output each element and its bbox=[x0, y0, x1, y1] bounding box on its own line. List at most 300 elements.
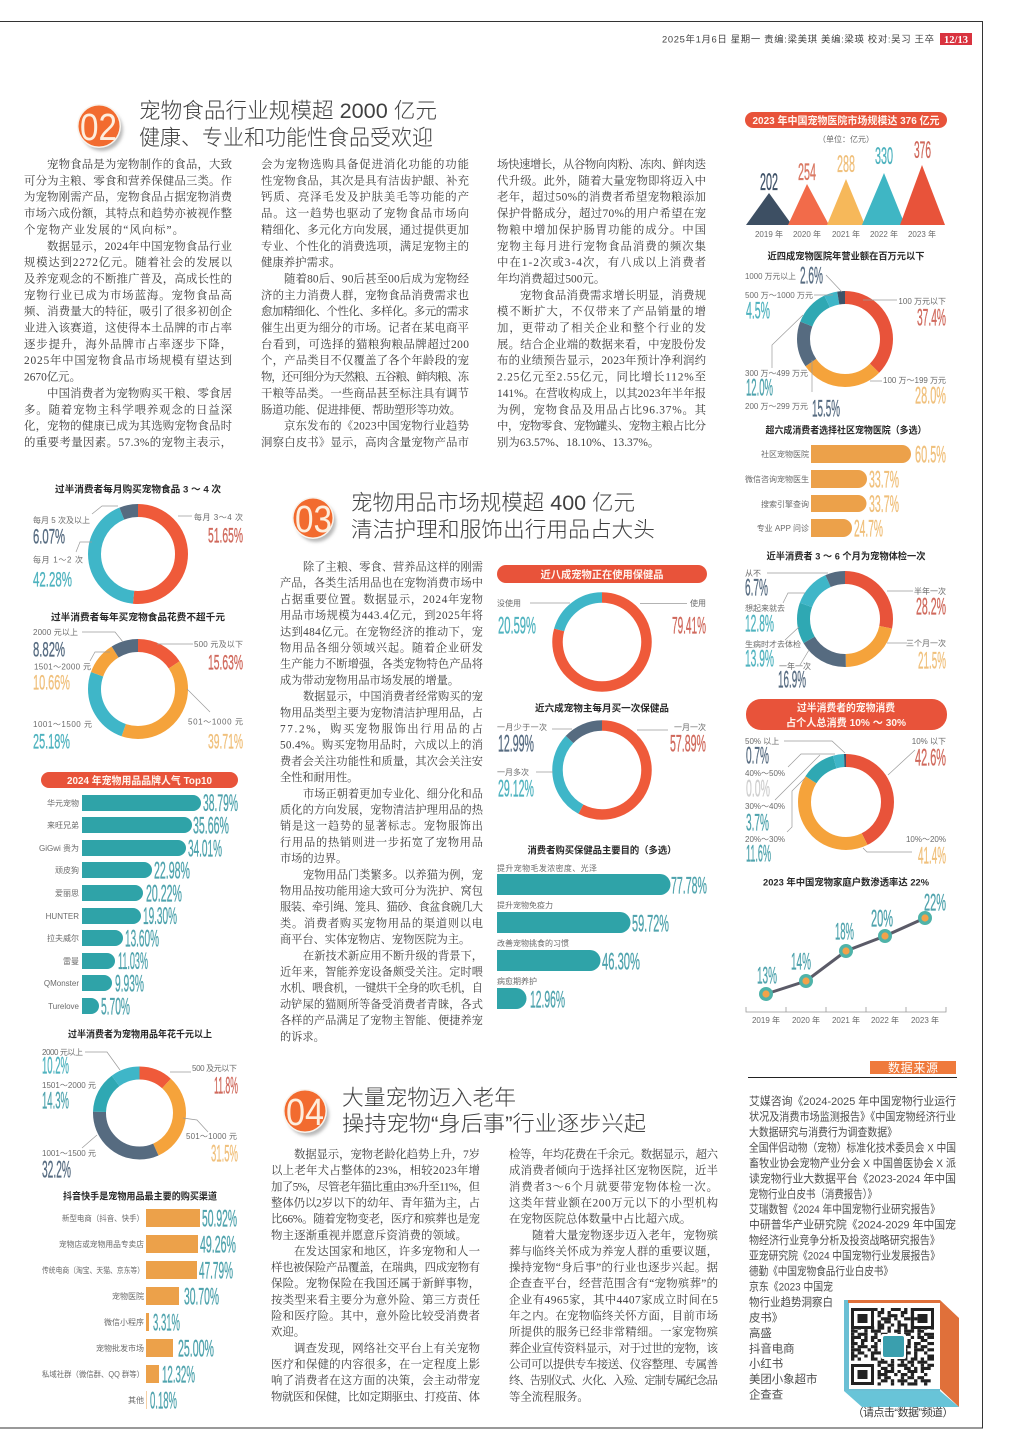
section 02 body column 2: 京东发布的《2023中国宠物行业趋势 bbox=[284, 419, 469, 433]
section 02 body column 1: 逐步提升，海外品牌市占率逐步下降， bbox=[24, 337, 232, 351]
section 02 body column 3: 2.25亿元至2.55亿元，同比增长112%至 bbox=[497, 370, 706, 384]
section 03 body text: 销是这一趋势的显著标志。宠物服饰出 bbox=[280, 819, 483, 833]
section 02 body column 1: 业进入该赛道，这使得本土品牌的市占率 bbox=[24, 320, 232, 334]
text: 37.4% bbox=[917, 305, 946, 332]
data sources list: 小红书 bbox=[749, 1358, 783, 1371]
leader lines and labels: 10.66% bbox=[33, 672, 70, 694]
leader lines and labels: 一月一次 bbox=[674, 722, 706, 732]
bar chart: Turelove bbox=[48, 1002, 80, 1011]
section 03 body text: 达到484亿元。在宠物经济的推动下，宠 bbox=[280, 624, 483, 638]
leader lines and labels bbox=[497, 598, 706, 640]
text: 50.92% bbox=[202, 1206, 237, 1233]
line chart: 2022 年 bbox=[871, 1015, 899, 1025]
bar chart: 12.32% bbox=[162, 1362, 195, 1389]
pill heading: 占个人总消费 10% ～ 30% bbox=[786, 716, 907, 729]
section 02 body column 3 bbox=[497, 157, 707, 449]
section 02 body column 1: 频、消费量大的特征，吸引了很多初创企 bbox=[24, 304, 233, 318]
panel: data sources bbox=[748, 1060, 959, 1419]
section 04 body column 2: 操持宠物“身后事”的行业也逐步兴起。据 bbox=[509, 1260, 718, 1274]
donut chart bbox=[804, 760, 888, 844]
heading: 抖音快手是宠物用品最主要的购买渠道 bbox=[63, 1190, 217, 1202]
leader lines and labels bbox=[745, 263, 946, 423]
donut chart bbox=[100, 1073, 180, 1153]
section 04 body column 2: 等全流程服务。 bbox=[509, 1389, 589, 1403]
data sources list: 全国伴侣动物（宠物）标准化技术委员会 X 中国 bbox=[749, 1140, 956, 1154]
donut chart bbox=[558, 726, 646, 814]
triangle chart: 254 bbox=[798, 159, 816, 186]
leader lines and labels: 15.5% bbox=[812, 396, 840, 423]
leader lines and labels: 501～1000 元 bbox=[188, 718, 243, 726]
panel: monthly food purchase donut bbox=[33, 484, 243, 598]
leader lines and labels: 2.6% bbox=[800, 263, 823, 290]
bar chart: 来旺兄弟 bbox=[47, 820, 79, 830]
data sources list: 高盛 bbox=[749, 1326, 772, 1340]
section 03 body text: 的诉求。 bbox=[280, 1029, 325, 1043]
section 03 body text: 77.2%，购买宠物服饰出行用品的占 bbox=[280, 722, 483, 736]
leader lines and labels: 1000 万元以上 bbox=[745, 272, 796, 281]
QR code bbox=[844, 1300, 959, 1407]
section 04 body column 2: 公司可以提供专车接送、仪容整理、专属善 bbox=[509, 1357, 718, 1371]
text: 60.5% bbox=[915, 442, 946, 469]
panel: checkup frequency donut bbox=[745, 550, 946, 694]
panel: brand popularity top 10 bbox=[39, 772, 238, 1021]
section 03 body text: 各样的产品满足了宠物主智能、便捷养宠 bbox=[280, 1013, 483, 1027]
section 04 body column 2: 企业有4965家，其中4407家成立时间在5 bbox=[509, 1292, 718, 1306]
data sources heading bbox=[748, 1060, 957, 1078]
data sources list: 宠物行业白皮书（消费报告）》 bbox=[749, 1187, 877, 1201]
section 03 body text: 市场正朝着更加专业化、细分化和品 bbox=[303, 786, 483, 800]
leader lines and labels: 半年一次 bbox=[914, 586, 946, 596]
section 02 body column 1: 个宠物产业发展的“风向标”。 bbox=[24, 222, 184, 236]
bar chart: 13.60% bbox=[125, 926, 159, 953]
text: 57.89% bbox=[670, 731, 706, 758]
leader lines and labels: 0.7% bbox=[746, 743, 769, 770]
bar chart: 雷曼 bbox=[63, 957, 79, 966]
line chart: 2021 年 bbox=[832, 1015, 860, 1025]
section 02 body column 3: 老年，超过50%的消费者希望宠物粮添加 bbox=[497, 190, 706, 204]
leader lines and labels: 10%～20% bbox=[906, 835, 946, 844]
bar chart bbox=[42, 1206, 237, 1415]
section 04 body column 1: 医疗和保健的内容很多，在一定程度上影 bbox=[271, 1357, 481, 1371]
bar chart: 微信咨询宠物医生 bbox=[745, 474, 809, 484]
section 03 title: 宠物用品市场规模超 400 亿元 bbox=[351, 491, 635, 515]
text: 49.26% bbox=[200, 1232, 236, 1259]
section 02 body column 3: 141%。在营收构成上，以其2023年半年报 bbox=[497, 386, 706, 400]
section 02 body column 1: 的重要考量因素。57.3%的宠物主表示， bbox=[24, 435, 232, 449]
text: 38.79% bbox=[203, 790, 238, 817]
section 03 body text: 动铲屎的猫厕所等备受消费者青睐，各式 bbox=[280, 997, 483, 1011]
leader lines and labels: 一月少于一次 bbox=[497, 722, 547, 732]
section 04 body column 1: 物就医和保健，比如定期驱虫、打疫苗、体 bbox=[271, 1389, 481, 1403]
leader lines and labels: 8.82% bbox=[33, 638, 65, 662]
section 02 body column 1: 市场六成份额，其特点和趋势亦被视作整 bbox=[24, 206, 233, 220]
section 03 body text: 占据重要位置。数据显示，2024年宠物 bbox=[280, 592, 483, 606]
pill heading: hospital market: 2023 年中国宠物医院市场规模达 376 亿元 bbox=[752, 114, 940, 127]
section 02 body column 2: 性宠物食品，其次是具有洁齿护龈、补充 bbox=[261, 173, 469, 187]
section 03 title: 清洁护理和服饰出行用品占大头 bbox=[351, 518, 655, 542]
section 03 title bbox=[351, 491, 655, 542]
section 02 body column 2: 随着80后、90后甚至00后成为宠物经 bbox=[284, 272, 470, 286]
section 03 body text: 在新技术新应用不断升级的背景下， bbox=[303, 948, 483, 962]
text: 31.5% bbox=[211, 1141, 238, 1168]
leader lines and labels: 42.28% bbox=[33, 568, 72, 592]
donut chart bbox=[94, 646, 182, 732]
bar chart: 46.30% bbox=[602, 949, 640, 976]
bar chart: 25.00% bbox=[178, 1336, 214, 1363]
section 02 body column 1: 2025年中国宠物食品市场规模有望达到 bbox=[24, 353, 232, 367]
data sources list bbox=[749, 1094, 957, 1402]
page header: 2025年1月6日 星期一 责编:梁美琪 美编:梁瑛 校对:吴习 王卒 bbox=[662, 34, 934, 44]
triangle chart: 2023 年 bbox=[908, 229, 936, 239]
bar chart: 专业 APP 问诊 bbox=[757, 523, 809, 533]
bar chart: 华元宠物 bbox=[47, 798, 79, 808]
section 04 body column 1: 加了5%，尽管老年猫比重由3%升至11%，但 bbox=[271, 1179, 481, 1193]
section 02 body column 3: 年均消费超过500元。 bbox=[497, 272, 605, 286]
section 04 body column 1: 在发达国家和地区，许多宠物和人一 bbox=[294, 1244, 480, 1258]
leader lines and labels: 50% 以上 bbox=[745, 737, 779, 746]
triangle chart: 2021 年 bbox=[832, 229, 860, 239]
bar chart: 3.31% bbox=[153, 1310, 180, 1337]
section 02 body column 2: 物，还可细分为天然粮、五谷粮、鲜肉粮、冻 bbox=[261, 370, 470, 384]
section 03 body text: 行用品的热销则进一步拓宽了宠物用品 bbox=[280, 835, 483, 849]
donut chart bbox=[558, 598, 646, 686]
data sources list: 中研普华产业研究院《2024-2029 年中国宠 bbox=[749, 1218, 956, 1232]
triangle chart bbox=[746, 137, 945, 239]
section 04 body column 1: 整体仍以2岁以下的幼年、青年猫为主，占 bbox=[271, 1196, 480, 1210]
pill heading: 近八成宠物正在使用保健品 bbox=[540, 568, 664, 581]
panel: yearly supplies spend donut bbox=[42, 1028, 238, 1184]
leader lines and labels: 从不 bbox=[745, 569, 761, 578]
text: 22% bbox=[924, 890, 946, 917]
bar chart: 19.30% bbox=[143, 903, 177, 930]
triangle chart: 376 bbox=[914, 137, 931, 164]
bar chart: 30.70% bbox=[184, 1284, 219, 1311]
bar chart: 9.93% bbox=[115, 971, 144, 998]
data sources list: 艾媒咨询《2024-2025 年中国宠物行业运行 bbox=[749, 1094, 956, 1108]
section 02 body column 3: 加，更带动了相关企业和整个行业的发 bbox=[497, 320, 706, 334]
bar chart: 24.7% bbox=[854, 516, 883, 543]
leader lines and labels: 1501～2000 元 bbox=[34, 662, 91, 672]
section 02 body column 3: 中，宠物零食、宠物罐头、宠物主粮占比分 bbox=[497, 419, 707, 433]
leader lines and labels: 10% 以下 bbox=[912, 737, 946, 746]
leader lines and labels: 1001～1500 元 bbox=[33, 720, 92, 729]
section 03 body text: 近年来，智能养宠设备颇受关注。定时喂 bbox=[280, 964, 483, 978]
text: 28.0% bbox=[915, 383, 946, 410]
section 02 body column 3: 为例，宠物食品及用品占比96.37%。其 bbox=[497, 402, 707, 416]
leader lines and labels: 500 万～1000 万元 bbox=[745, 291, 813, 300]
text: 42.6% bbox=[915, 745, 946, 772]
section 02 body column 1: 为宠物刚需产品，宠物食品占据宠物消费 bbox=[24, 190, 233, 204]
text: 51.65% bbox=[208, 524, 243, 548]
panel: purchase channels bars bbox=[42, 1190, 237, 1415]
section 04 body column 1 bbox=[271, 1147, 481, 1403]
heading: 消费者购买保健品主要目的（多选） bbox=[528, 844, 676, 856]
section 04 body column 2: 消费者3～6个月就要带宠物体检一次。 bbox=[509, 1179, 718, 1193]
section 02 body column 2: 钙质、亮泽毛发及护肤美毛等功能的产 bbox=[261, 190, 469, 204]
section 02 body column 1: 数据显示，2024年中国宠物食品行业 bbox=[47, 239, 233, 253]
leader lines and labels: 12.8% bbox=[745, 611, 774, 638]
leader lines and labels: 一年一次 bbox=[779, 661, 811, 671]
section 03 body text bbox=[280, 560, 484, 1043]
section 03 body text: 费者会关注功能性和质量，其次会关注安 bbox=[280, 754, 484, 768]
data sources list: 状况及消费市场监测报告》《中国宠物经济行业 bbox=[749, 1110, 956, 1124]
section 04 badge: 04 bbox=[286, 1092, 324, 1134]
bar chart: 搜索引擎查询 bbox=[761, 499, 809, 509]
section 02 body column 1: 多。随着宠物主科学喂养观念的日益深 bbox=[24, 402, 233, 416]
section 04 body column 2: 企查查平台，经营范围含有“宠物殡葬”的 bbox=[509, 1276, 718, 1290]
text: 39.71% bbox=[208, 730, 243, 754]
section 02 body column 3: 代升级。此外，随着大量宠物即将迈入中 bbox=[497, 173, 706, 187]
section 04 body column 2: 在宠物医院总体数量中占比超六成。 bbox=[509, 1212, 691, 1226]
section 04 title: 操持宠物“身后事”行业逐步兴起 bbox=[342, 1112, 646, 1136]
leader lines and labels: 30%～40% bbox=[745, 802, 785, 811]
section 04 body column 2: 终、告别仪式、火化、入殓、定制专属纪念品 bbox=[509, 1373, 718, 1387]
line chart: 2019 年 bbox=[752, 1015, 780, 1025]
section 03 body text: 除了主粮、零食、营养品这样的刚需 bbox=[303, 560, 483, 574]
text: 11.8% bbox=[214, 1073, 238, 1100]
bar chart: 20.22% bbox=[146, 881, 182, 908]
leader lines and labels: 三个月一次 bbox=[906, 638, 946, 648]
data sources list: 物行业趋势洞察白 bbox=[749, 1295, 833, 1309]
triangle chart: 2019 年 bbox=[755, 229, 783, 239]
leader lines and labels: 11.6% bbox=[746, 841, 771, 868]
leader lines and labels bbox=[745, 737, 946, 870]
section 02 body column 2: 精细化、多元化方向发展，通过提供更加 bbox=[261, 222, 469, 236]
triangle chart: 288 bbox=[837, 151, 855, 178]
bar chart: 顽皮狗 bbox=[55, 865, 79, 875]
bar chart: 传统电商（淘宝、天猫、京东等） bbox=[42, 1265, 144, 1275]
heading: 近四成宠物医院年营业额在百万元以下 bbox=[768, 250, 925, 262]
section 02 body column 3: 场快速增长，从谷物向肉粉、冻肉、鲜肉迭 bbox=[497, 157, 706, 171]
section 03 body text: 质化的方向发展，宠物清洁护理用品的热 bbox=[280, 802, 484, 816]
leader lines and labels: 16.9% bbox=[778, 667, 806, 694]
data sources heading: 数据来源 bbox=[888, 1060, 938, 1075]
section 02 title bbox=[139, 99, 437, 150]
text: 28.2% bbox=[916, 594, 946, 621]
bar chart bbox=[497, 863, 707, 1014]
section 04 body column 1: 欢迎。 bbox=[271, 1325, 305, 1339]
bar chart: 宠物医院 bbox=[112, 1291, 144, 1301]
leader lines and labels: 10.2% bbox=[42, 1053, 69, 1080]
bar chart: 33.7% bbox=[869, 467, 899, 494]
bar chart: 新型电商（抖音、快手） bbox=[62, 1213, 144, 1223]
section 02 title: 宠物食品行业规模超 2000 亿元 bbox=[139, 99, 437, 123]
section 03 body text: 生产能力不断增强，各类宠物特色产品将 bbox=[280, 657, 483, 671]
section 04 body column 2: 这类年营业额在200万元以下的小型机构 bbox=[509, 1196, 718, 1210]
panel: community hospital bars bbox=[745, 424, 946, 543]
section 02 body column 3: 宠物主每月进行宠物食品消费的频次集 bbox=[497, 239, 707, 253]
bar chart bbox=[745, 442, 946, 543]
data sources list: 美团小象超市 bbox=[749, 1372, 817, 1386]
section 02 body column 3: 别为63.57%、18.10%、13.37%。 bbox=[497, 435, 659, 449]
section 04 body column 1: 按类型来看主要分为意外险、第三方责任 bbox=[271, 1292, 480, 1306]
bar chart: 其他 bbox=[128, 1395, 144, 1405]
section 03 body text: 数据显示，中国消费者经常购买的宠 bbox=[303, 689, 483, 703]
triangle chart: 202 bbox=[760, 169, 778, 196]
data sources list: 亚宠研究院《2024 中国宠物行业发展报告》 bbox=[749, 1249, 940, 1263]
line chart: 20% bbox=[871, 906, 893, 933]
section 03 body text: 宠物用品门类繁多。以养猫为例，宠 bbox=[303, 867, 483, 881]
pill heading bbox=[41, 772, 238, 788]
section 03 body text: 用品市场规模为443.4亿元，到2025年将 bbox=[280, 608, 483, 622]
bar chart: 22.98% bbox=[154, 858, 190, 885]
panel: share of personal spending donut bbox=[745, 699, 947, 870]
unit note: （单位：亿元） bbox=[818, 134, 874, 144]
leader lines and labels: 500 及元以下 bbox=[192, 1064, 237, 1073]
leader lines and labels: 20.59% bbox=[498, 613, 536, 640]
section 02 body column 1: 可分为主粮、零食和营养保健品三类。作 bbox=[24, 173, 232, 187]
section 02 body column 3: 模不断扩大，不仅带来了产品销量的增 bbox=[497, 304, 706, 318]
line chart: 2023 年 bbox=[911, 1015, 939, 1025]
leader lines and labels: 没使用 bbox=[497, 598, 521, 608]
leader lines and labels: 29.12% bbox=[498, 776, 534, 803]
section 04 body column 2 bbox=[509, 1147, 719, 1403]
triangle chart: 2020 年 bbox=[793, 229, 821, 239]
leader lines and labels bbox=[33, 506, 243, 592]
panel: supplement purpose bars bbox=[497, 844, 707, 1014]
bar chart: 社区宠物医院 bbox=[761, 449, 809, 459]
leader lines and labels: 32.2% bbox=[42, 1157, 71, 1184]
donut chart bbox=[804, 298, 886, 380]
leader lines and labels: 200 万～299 万元 bbox=[745, 402, 808, 411]
leader lines and labels: 4.5% bbox=[746, 298, 770, 325]
pill heading bbox=[746, 699, 947, 730]
section 03 body text: 水机、喂食机，一键烘干全身的吹毛机，自 bbox=[280, 981, 483, 995]
text: 79.41% bbox=[672, 613, 706, 640]
bar chart: 微信小程序 bbox=[104, 1317, 144, 1327]
bar chart: GiGwi 贵为 bbox=[39, 843, 79, 853]
heading: 2023 年中国宠物家庭户数渗透率达 22% bbox=[763, 876, 929, 888]
line chart: 18% bbox=[835, 919, 854, 946]
triangle chart: 2022 年 bbox=[870, 229, 898, 239]
section 02 body column 3: 展。结合企业端的数据来看，中宠股份发 bbox=[497, 337, 706, 351]
section 03 body text: 物用品各细分领域兴起。随着企业研发 bbox=[280, 640, 483, 654]
section 02 body column 3: 中在1-2次或3-4次，有八成以上消费者 bbox=[497, 255, 706, 269]
section 02 body column 2: 会为宠物选购具备促进消化功能的功能 bbox=[261, 157, 469, 171]
bar chart: 11.03% bbox=[118, 948, 148, 975]
leader lines and labels: 501～1000 元 bbox=[186, 1132, 237, 1141]
leader lines and labels: 1501～2000 元 bbox=[42, 1081, 96, 1090]
section 03 body text: 物用品类型主要为宠物清洁护理用品，占 bbox=[280, 705, 483, 719]
section 02 body column 2 bbox=[261, 157, 470, 449]
data sources list: 德勤《中国宠物食品行业白皮书》 bbox=[749, 1264, 893, 1278]
data sources list: 大数据研究与消费行为调查数据》 bbox=[749, 1125, 897, 1139]
section 02 body column 2: 专业、个性化的消费选项，满足宠物主的 bbox=[261, 239, 469, 253]
pill heading: 过半消费者的宠物消费 bbox=[797, 701, 895, 714]
bar chart: 0.18% bbox=[150, 1388, 177, 1415]
section 04 body column 2: 葬企业宣传资料显示，对于过世的宠物，该 bbox=[509, 1341, 719, 1355]
section 04 body column 2: 检等，年均花费在千余元。数据显示，超六 bbox=[509, 1147, 719, 1161]
section 02 body column 1: 中国消费者为宠物购买干粮、零食居 bbox=[47, 386, 232, 400]
line chart: 14% bbox=[791, 949, 811, 976]
section 04 body column 2: 成消费者倾向于选择社区宠物医院，近半 bbox=[509, 1163, 718, 1177]
section 02 body column 2: 健康养护需求。 bbox=[261, 255, 341, 269]
leader lines and labels: 1001～1500 元 bbox=[42, 1149, 96, 1158]
section 02 body column 3: 物粮中增加保护肠胃功能的成分。中国 bbox=[497, 222, 706, 236]
leader lines and labels: 40%～50% bbox=[745, 769, 785, 778]
section 02 body column 2: 愈加精细化、个性化、多样化。多元的需求 bbox=[261, 304, 469, 318]
bar chart: 宠物店或宠物用品专卖店 bbox=[59, 1239, 144, 1249]
bar chart: QMonster bbox=[44, 979, 79, 988]
section 02 body column 2: 济的主力消费人群，宠物食品消费需求也 bbox=[261, 288, 469, 302]
data sources list: 艾瑞数智《2024 年中国宠物行业研究报告》 bbox=[749, 1202, 940, 1216]
section 02 body column 2: 洞察白皮书》显示，高肉含量宠物产品市 bbox=[261, 435, 469, 449]
leader lines and labels: 12.99% bbox=[498, 731, 534, 758]
leader lines and labels: 一月多次 bbox=[497, 767, 529, 777]
leader lines and labels: 3.7% bbox=[746, 810, 769, 837]
section 02 badge: 02 bbox=[80, 107, 117, 149]
section 02 body column 3: 布的业绩预告显示，2023年预计净利润约 bbox=[497, 353, 706, 367]
bar chart: 5.70% bbox=[101, 994, 130, 1021]
section 02 body column 3: 宠物食品消费需求增长明显，消费规 bbox=[520, 288, 706, 302]
leader lines and labels: 14.3% bbox=[42, 1088, 69, 1115]
bar chart: 12.96% bbox=[530, 987, 565, 1014]
bar chart: 33.7% bbox=[869, 491, 899, 518]
leader lines and labels bbox=[497, 722, 706, 803]
pill heading: 2024 年宠物用品品牌人气 Top10 bbox=[67, 774, 212, 787]
section 04 title: 大量宠物迈入老年 bbox=[342, 1086, 516, 1110]
section 03 body text: 市场的边界。 bbox=[280, 851, 347, 865]
heading: 近六成宠物主每月买一次保健品 bbox=[535, 702, 669, 714]
section 02 body column 1: 宠物行业已成为市场蓝海。宠物食品高 bbox=[24, 288, 232, 302]
bar chart: 提升宠物毛发浓密度、光泽 bbox=[497, 863, 597, 873]
leader lines and labels: 12.0% bbox=[746, 375, 773, 402]
section 02 body column 2: 个，产品类目不仅覆盖了各个年龄段的宠 bbox=[261, 353, 469, 367]
section 04 title bbox=[342, 1086, 646, 1136]
section 04 body column 2: 年之内。在宠物临终关怀方面，目前市场 bbox=[509, 1308, 718, 1322]
leader lines and labels bbox=[745, 569, 946, 694]
leader lines and labels bbox=[42, 1048, 238, 1184]
bar chart: 宠物批发市场 bbox=[96, 1343, 144, 1353]
section 03 body text: 服装、牵引绳、笼具、猫砂、食盆食碗几大 bbox=[280, 900, 483, 914]
section 02 body column 1: 2670亿元。 bbox=[24, 371, 81, 384]
bar chart: 34.01% bbox=[188, 836, 222, 863]
data sources list: 京东《2023 中国宠 bbox=[749, 1280, 833, 1294]
leader lines and labels: 6.7% bbox=[745, 575, 768, 602]
section 04 body column 1: 物主逐渐重视并愿意斥资消费的领域。 bbox=[271, 1228, 467, 1242]
bar chart: 爱丽思 bbox=[55, 889, 79, 898]
leader lines and labels: 25.18% bbox=[33, 730, 70, 754]
section 02 body column 2: 品。这一趋势也驱动了宠物食品市场向 bbox=[261, 206, 469, 220]
bar chart: 拉夫威尔 bbox=[47, 933, 79, 943]
leader lines and labels: 2000 元以上 bbox=[42, 1048, 83, 1057]
section 04 body column 2: 随着大量宠物逐步迈入老年，宠物殡 bbox=[532, 1228, 719, 1242]
text: 15.63% bbox=[208, 652, 243, 674]
leader lines and labels: 6.07% bbox=[33, 526, 65, 548]
leader lines and labels: 2000 元以上 bbox=[33, 628, 78, 637]
text: 21.5% bbox=[918, 648, 946, 675]
section 04 body column 1: 数据显示，宠物老龄化趋势上升，7岁 bbox=[294, 1147, 480, 1161]
section 02 body column 2: 肠道功能、促进排便、帮助塑形等功效。 bbox=[261, 402, 461, 416]
leader lines and labels: 生病时才去体检 bbox=[745, 639, 801, 649]
bar chart: 59.72% bbox=[632, 911, 669, 938]
leader lines and labels: 20%～30% bbox=[745, 835, 785, 844]
section 04 body column 1: 以上老年犬占整体的23%，相较2023年增 bbox=[271, 1163, 480, 1177]
section 02 body column 2: 台看到，可选择的猫粮狗粮品牌超过200 bbox=[261, 337, 469, 351]
data sources list: 抖音电商 bbox=[749, 1341, 795, 1355]
section 02 body column 1: 宠物食品是为宠物制作的食品，大致 bbox=[47, 157, 233, 171]
text: 77.78% bbox=[671, 873, 707, 900]
donut chart bbox=[804, 578, 886, 660]
pill heading bbox=[497, 565, 707, 583]
bar chart: 35.66% bbox=[193, 813, 229, 840]
section 04 body column 2: 葬与临终关怀成为养宠人群的重要议题， bbox=[509, 1244, 718, 1258]
panel: health supplement usage donut bbox=[497, 565, 707, 686]
section 02 body column 2: 干粮等品类。一些商品甚至标注具有调节 bbox=[261, 386, 469, 400]
bar chart: 提升宠物免疫力 bbox=[497, 900, 553, 910]
section 03 body text: 成为带动宠物用品市场发展的增量。 bbox=[280, 673, 459, 687]
section 03 body text: 50.4%。购买宠物用品时，六成以上的消 bbox=[280, 738, 483, 752]
